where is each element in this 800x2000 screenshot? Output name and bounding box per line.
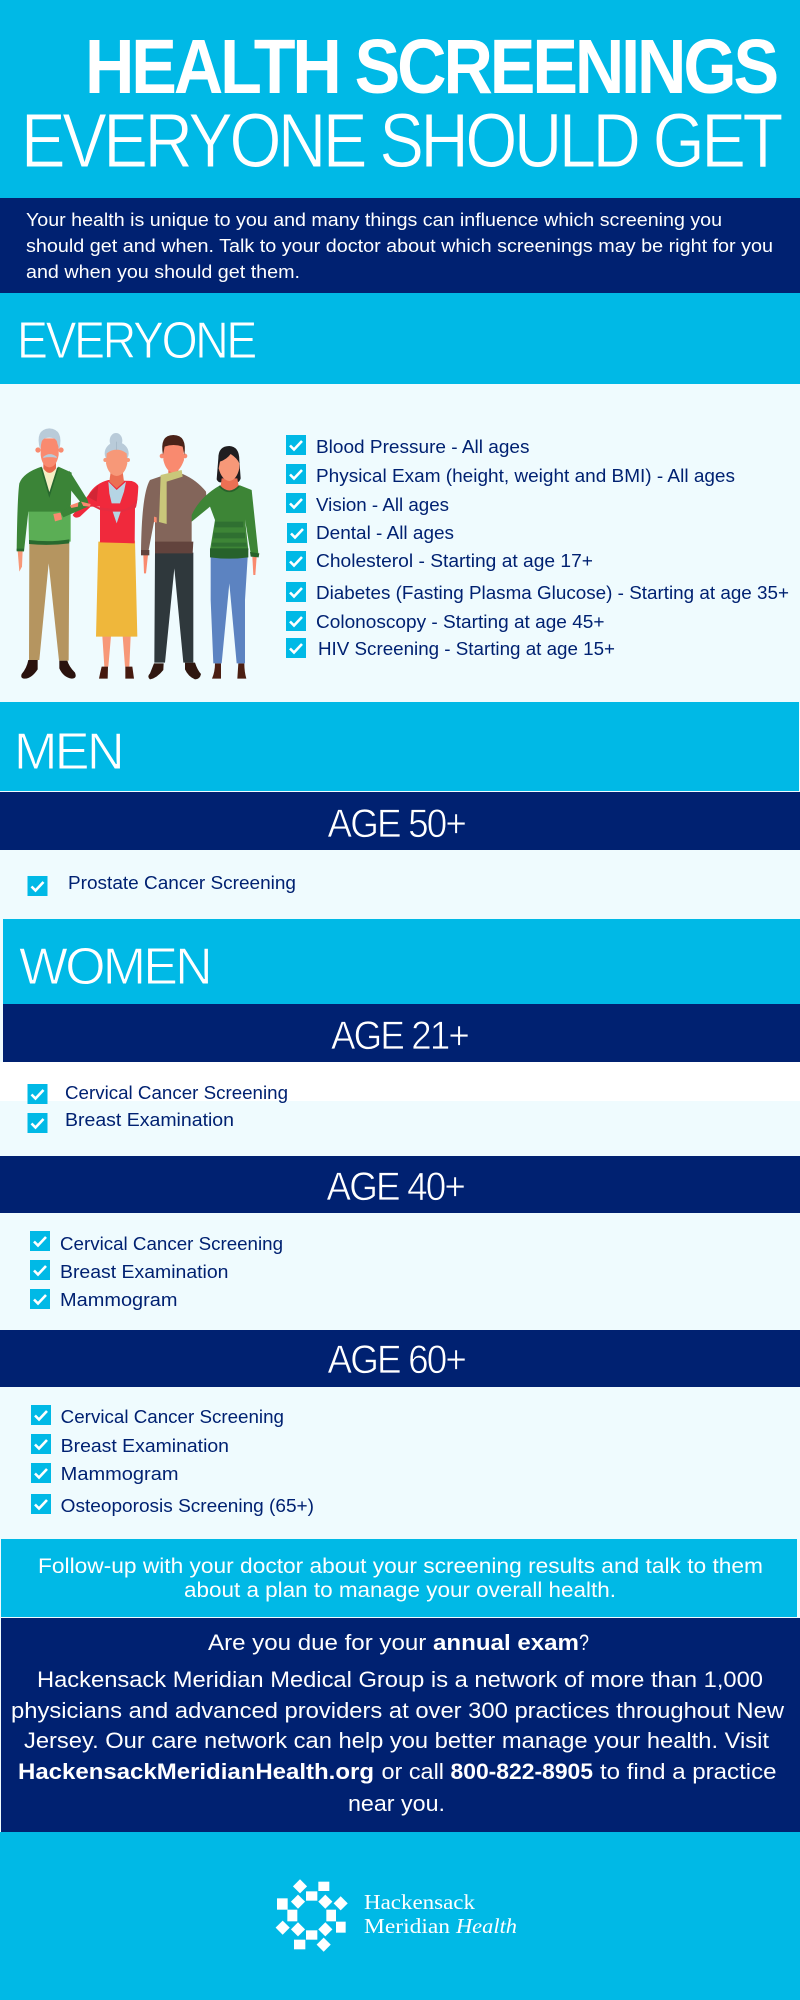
icon: checkbox [31, 1494, 51, 1514]
icon: checkbox [28, 1084, 48, 1104]
item: Cervical Cancer Screening [65, 1082, 288, 1103]
logo wordmark [364, 1890, 517, 1938]
checklist: women age 60+ [31, 1405, 314, 1516]
heading: age 40+: AGE 40+ [326, 1165, 465, 1209]
item: Breast Examination [65, 1109, 234, 1130]
item: Mammogram [60, 1289, 178, 1310]
item: Vision - All ages [316, 494, 449, 515]
age band: 60+ [0, 1330, 800, 1387]
intro text: and when you should get them. [26, 261, 300, 282]
item: Colonoscopy - Starting at age 45+ [316, 611, 604, 632]
heading band: Women [3, 919, 800, 1004]
panel: annual exam [1, 1618, 800, 1832]
annual exam question: Are you due for your [208, 1630, 433, 1655]
header: title band [0, 0, 800, 198]
icon: checkbox [28, 1113, 48, 1133]
heading: age 21+: AGE 21+ [331, 1014, 469, 1058]
logo wordmark: Meridian [364, 1914, 451, 1938]
annual exam body text: Hackensack Meridian Medical Group is a network of more than 1,000 [37, 1667, 763, 1692]
age band: 40+ [0, 1156, 800, 1213]
item: Prostate Cancer Screening [68, 872, 296, 893]
checklist: women age 40+ [30, 1231, 283, 1310]
annual exam question: annual exam [433, 1630, 579, 1655]
age band: 21+ [3, 1004, 800, 1062]
heading: everyone: EVERYONE [17, 312, 256, 370]
annual exam body text: physicians and advanced providers at over 300 practices throughout New [11, 1698, 784, 1723]
icon: checkbox [287, 523, 307, 543]
item: Breast Examination [61, 1435, 229, 1456]
logo wordmark: Hackensack [364, 1890, 476, 1914]
annual exam body text: or call [382, 1759, 444, 1784]
item: HIV Screening - Starting at age 15+ [318, 638, 615, 659]
icon: checkbox [286, 638, 306, 658]
heading: men: MEN [14, 723, 122, 781]
item: Mammogram [61, 1463, 179, 1484]
icon: checkbox [286, 464, 306, 484]
checklist: everyone [286, 435, 789, 659]
callout text: about a plan to manage your overall health. [184, 1579, 616, 1602]
icon: checkbox [30, 1231, 50, 1251]
annual exam body text: near you. [348, 1791, 445, 1816]
callout text: Follow-up with your doctor about your screening results and talk to them [38, 1555, 763, 1578]
icon: checkbox [28, 876, 48, 896]
icon: checkbox [30, 1289, 50, 1309]
person: younger woman [154, 446, 259, 679]
checklist: men age 50+ [28, 872, 296, 896]
callout: follow-up [1, 1539, 797, 1617]
illustration: four people standing together [17, 428, 259, 679]
heading band: Men [0, 702, 799, 791]
annual exam body text: 800-822-8905 [450, 1759, 593, 1784]
white strip behind age 21+ list [0, 1062, 800, 1101]
heading: women: WOMEN [19, 938, 210, 996]
item: Osteoporosis Screening (65+) [61, 1495, 314, 1516]
icon: checkbox [286, 582, 306, 602]
annual exam body text: Jersey. Our care network can help you better manage your health. Visit [24, 1728, 769, 1753]
item: Cervical Cancer Screening [61, 1406, 284, 1427]
item: Diabetes (Fasting Plasma Glucose) - Starting at age 35+ [316, 582, 789, 603]
checklist: women age 21+ [28, 1082, 288, 1133]
item: Dental - All ages [316, 522, 454, 543]
icon: checkbox [286, 611, 306, 631]
annual exam body text: HackensackMeridianHealth.org [18, 1759, 374, 1784]
icon: checkbox [31, 1463, 51, 1483]
item: Physical Exam (height, weight and BMI) - All ages [316, 465, 735, 486]
heading band: Everyone [0, 293, 800, 384]
item: Cervical Cancer Screening [60, 1233, 283, 1254]
item: Blood Pressure - All ages [316, 436, 530, 457]
icon: checkbox [286, 435, 306, 455]
item: Cholesterol - Starting at age 17+ [316, 550, 593, 571]
annual exam question: ? [579, 1630, 589, 1655]
panel: introduction [0, 198, 800, 293]
annual exam body text: to find a practice [600, 1759, 776, 1784]
icon: checkbox [286, 551, 306, 571]
logo: Hackensack Meridian Health [276, 1879, 517, 1952]
logo wordmark: Health [455, 1914, 517, 1938]
intro text: Your health is unique to you and many things can influence which screening you [26, 209, 722, 230]
annual exam body text [11, 1667, 784, 1816]
age band: 50+ [0, 792, 800, 850]
intro text [26, 209, 773, 282]
icon: checkbox [286, 493, 306, 513]
item: Breast Examination [60, 1261, 228, 1282]
person: older woman [73, 433, 138, 679]
person: younger man [141, 435, 207, 679]
callout text [38, 1555, 763, 1602]
icon: checkbox [30, 1260, 50, 1280]
intro text: should get and when. Talk to your doctor about which screenings may be right for you [26, 235, 773, 256]
logo mark [276, 1879, 348, 1952]
icon: checkbox [31, 1405, 51, 1425]
person: older man [17, 428, 91, 679]
heading: age 50+: AGE 50+ [328, 802, 466, 846]
footer band [0, 1832, 800, 2000]
icon: checkbox [31, 1434, 51, 1454]
heading: age 60+: AGE 60+ [328, 1338, 466, 1382]
